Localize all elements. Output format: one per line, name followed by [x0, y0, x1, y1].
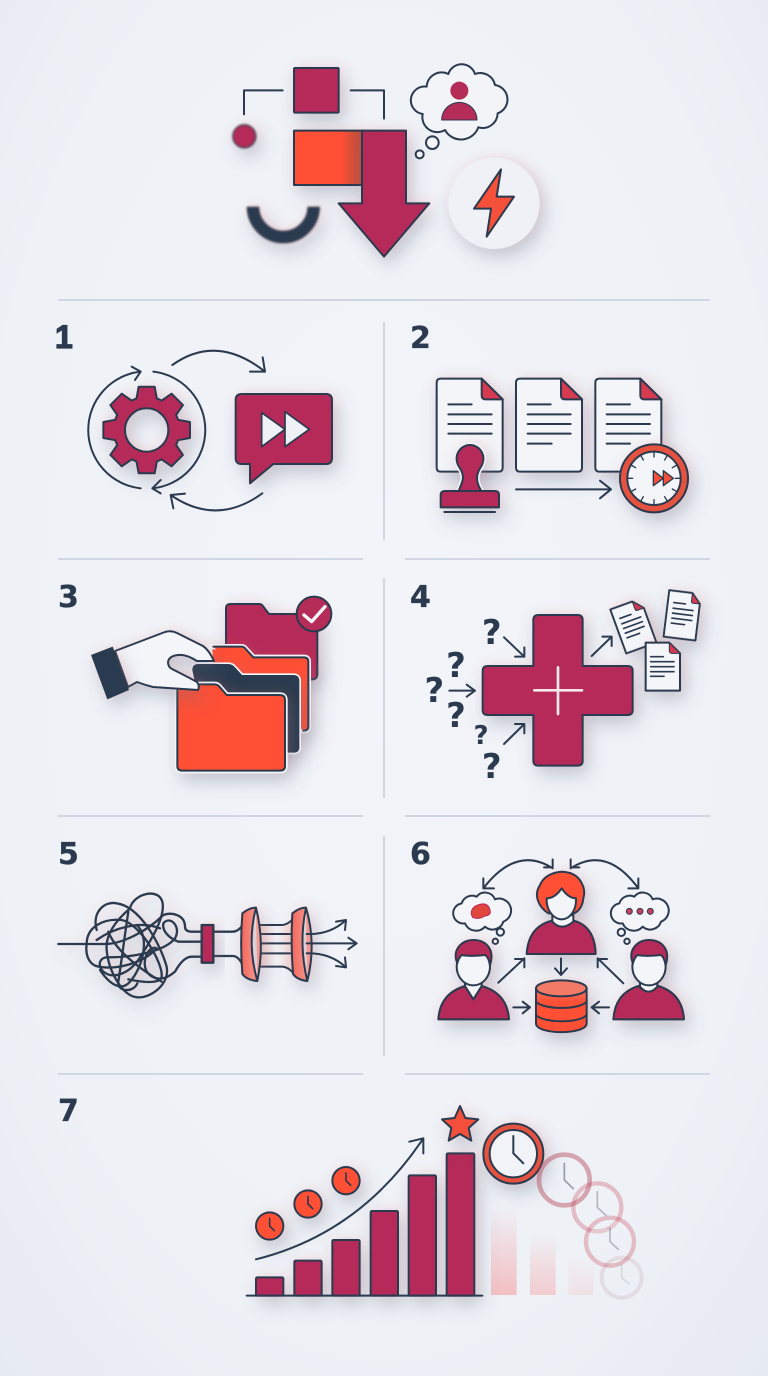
- arrows: to centre and database: [498, 958, 623, 1013]
- icon: straight document: [646, 643, 680, 691]
- chart baseline: [247, 1293, 482, 1299]
- small orange clocks: [256, 1167, 360, 1240]
- number 2: 2: [410, 321, 431, 356]
- icon: central person: [527, 872, 596, 954]
- panel 3: folders and hand: [58, 580, 331, 771]
- icon: left thought cloud: [453, 893, 511, 944]
- panel 3 icons: [91, 597, 331, 771]
- panel 1 icons: [88, 351, 332, 510]
- question marks: ?: [446, 646, 466, 686]
- icon: fast forward clock: [620, 444, 688, 512]
- number 5: 5: [58, 837, 79, 872]
- icon: upright tilted document: [664, 590, 701, 640]
- icon: blurred circle: [233, 125, 256, 148]
- icon: filter tube: [258, 917, 295, 975]
- question marks: ?: [424, 671, 444, 711]
- icon: star: [442, 1106, 478, 1141]
- question marks: ?: [482, 747, 502, 787]
- icon: tangled scribble: [58, 894, 202, 997]
- arrow: top curve: [172, 351, 265, 372]
- question marks: ?: [482, 613, 502, 653]
- faded bars: [491, 1207, 593, 1295]
- panel 1: gear and fast forward: [55, 319, 332, 510]
- icon: gear cycle arrows: [88, 367, 205, 493]
- icon: right person: [613, 940, 684, 1019]
- arrows: outflow: [307, 920, 357, 967]
- number 6: 6: [410, 837, 431, 872]
- icon: orange folder: [209, 647, 308, 731]
- icon: stamp: [441, 445, 499, 512]
- number 3: 3: [58, 580, 79, 615]
- icon: second lens disc: [292, 908, 312, 981]
- icon: right connector bracket: [351, 90, 384, 119]
- arrow: to clock: [516, 481, 611, 498]
- arrow: bottom curve: [171, 493, 262, 510]
- icon: down arrow: [339, 131, 429, 257]
- icon: navy folder: [193, 665, 298, 752]
- icon: database: [536, 980, 587, 1032]
- panel 7 chart: [247, 1106, 642, 1298]
- panel 6: people and database: [410, 837, 684, 1032]
- panel 7: rising bars and fading clocks: [58, 1094, 642, 1298]
- number 4: 4: [410, 580, 431, 615]
- arrow: growth curve: [256, 1138, 423, 1259]
- icon: thought cloud with person: [411, 64, 507, 158]
- arrows into cross: [449, 637, 612, 744]
- icon: back crimson folder: [226, 604, 317, 679]
- icon: crimson square: [294, 68, 339, 113]
- icon: left person: [438, 940, 509, 1019]
- panel 4: cross, questions and documents: [410, 580, 701, 787]
- panel 5: tangle to streamlined flow: [58, 837, 357, 997]
- question marks: ?: [446, 696, 466, 736]
- fading clocks: [539, 1155, 642, 1298]
- panel 6 icons: [438, 859, 684, 1032]
- icon: first lens disc: [241, 908, 261, 981]
- panel 5 icons: [58, 894, 357, 997]
- icon: navy half ring: [253, 207, 314, 237]
- icon: document 3: [595, 379, 661, 472]
- question marks: [424, 613, 502, 787]
- icon: orange rectangle: [294, 131, 363, 185]
- icon: document 2: [516, 379, 582, 472]
- icon: fast forward speech bubble: [236, 394, 332, 483]
- icon: gear: [103, 387, 190, 473]
- number 7: 7: [58, 1094, 79, 1129]
- panel 4 icons: [424, 590, 701, 787]
- panel 2 icons: [437, 379, 688, 512]
- arrow: top left curve: [483, 859, 553, 888]
- icon: tilted document: [610, 599, 656, 653]
- icon: document 1: [437, 379, 503, 472]
- icon: medical cross: [483, 615, 633, 766]
- icon: hand holding folder: [91, 631, 214, 699]
- arrow: top right curve: [571, 859, 638, 888]
- panel 2: documents, stamp and clock: [410, 321, 688, 512]
- icon: pipe and crimson clamp: [202, 925, 243, 965]
- number 1: 1: [55, 319, 73, 355]
- question marks: ?: [473, 721, 489, 751]
- icon: large clock: [483, 1124, 543, 1184]
- header illustration: [233, 64, 540, 257]
- icon: front orange folder: [177, 684, 285, 771]
- icon: lightning badge: [448, 158, 540, 249]
- icon: right thought cloud: [611, 893, 669, 944]
- icon: check badge: [297, 597, 331, 631]
- icon: left connector bracket: [244, 90, 283, 114]
- bar chart: [256, 1153, 474, 1296]
